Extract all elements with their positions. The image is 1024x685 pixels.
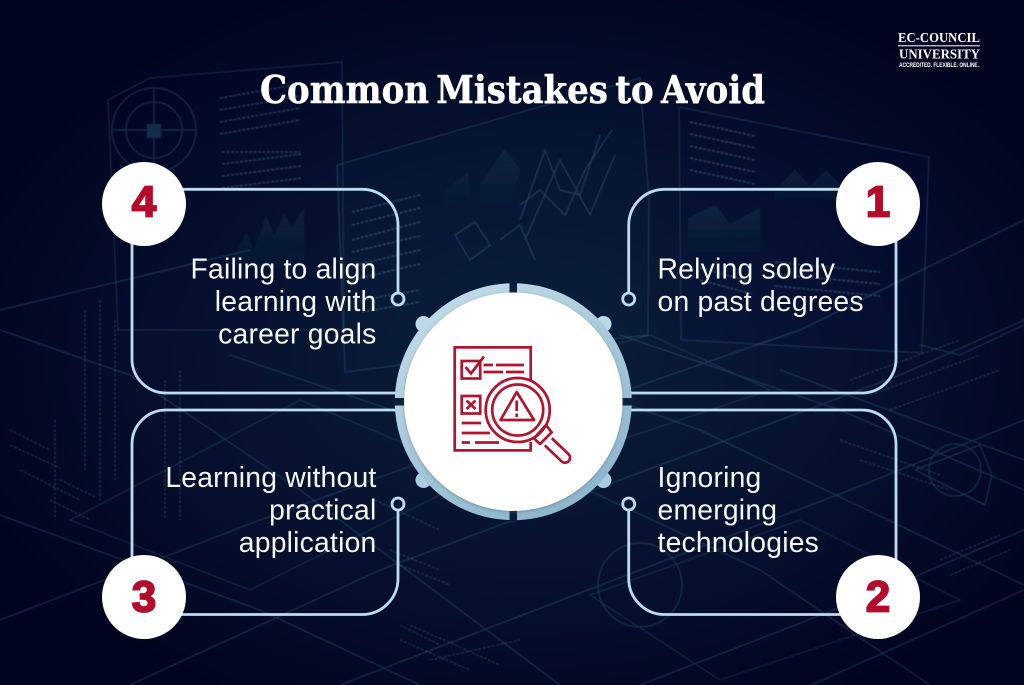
connector 1: [623, 189, 896, 393]
text: mistake 3: Learning without: [165, 461, 376, 493]
text: mistake 3: practical: [269, 494, 376, 526]
text: mistake 2: emerging: [658, 494, 777, 526]
logo wordmark bottom: UNIVERSITY: [899, 48, 980, 62]
panel: mistake 3: [102, 410, 404, 639]
number badge 2: 2: [866, 572, 890, 622]
logo rule: [898, 45, 980, 46]
text: mistake 2: [658, 461, 819, 558]
hub white disc: [404, 292, 622, 511]
number badge 4: 4: [132, 178, 157, 226]
text: mistake 1: [658, 252, 864, 317]
background: circuit floor grid: [0, 220, 1024, 685]
number badge 2: [836, 555, 920, 639]
central hub: [393, 281, 634, 523]
connector 3: [132, 410, 404, 614]
logo tagline: ACCREDITED. FLEXIBLE. ONLINE.: [899, 63, 979, 69]
panel: mistake 1: [623, 162, 920, 393]
hub outer ring with notches: [393, 281, 634, 523]
connector 2: [623, 410, 896, 614]
text: mistake 4: [190, 252, 376, 350]
panel: mistake 2: [623, 410, 920, 639]
text: mistake 3: [165, 461, 376, 558]
background: data streams: [10, 300, 1010, 670]
number badge 1: [836, 162, 920, 246]
logo: EC-Council University: [898, 31, 980, 69]
background screen: right: [679, 107, 929, 353]
number badge 1: 1: [866, 178, 890, 226]
number badge 3: [102, 555, 186, 639]
panel: mistake 4: [102, 162, 404, 393]
text: mistake 4: Failing to align: [190, 252, 376, 284]
logo wordmark top: EC-COUNCIL: [898, 31, 980, 46]
text: mistake 4: learning with: [215, 285, 376, 317]
background screen: left: [108, 62, 344, 330]
text: mistake 1: Relying solely: [658, 252, 836, 284]
title: Common Mistakes to Avoid: [260, 67, 765, 112]
connector 4: [132, 189, 404, 393]
text: mistake 3: application: [239, 526, 376, 558]
number badge 4: [102, 162, 186, 246]
text: mistake 2: technologies: [658, 526, 819, 558]
icon: checklist with magnifier and warning: [455, 347, 570, 463]
number badge 3: 3: [132, 572, 156, 622]
text: mistake 2: Ignoring: [658, 461, 762, 493]
text: mistake 1: on past degrees: [658, 285, 864, 317]
background screen: center: [337, 78, 649, 372]
text: mistake 4: career goals: [218, 318, 376, 350]
